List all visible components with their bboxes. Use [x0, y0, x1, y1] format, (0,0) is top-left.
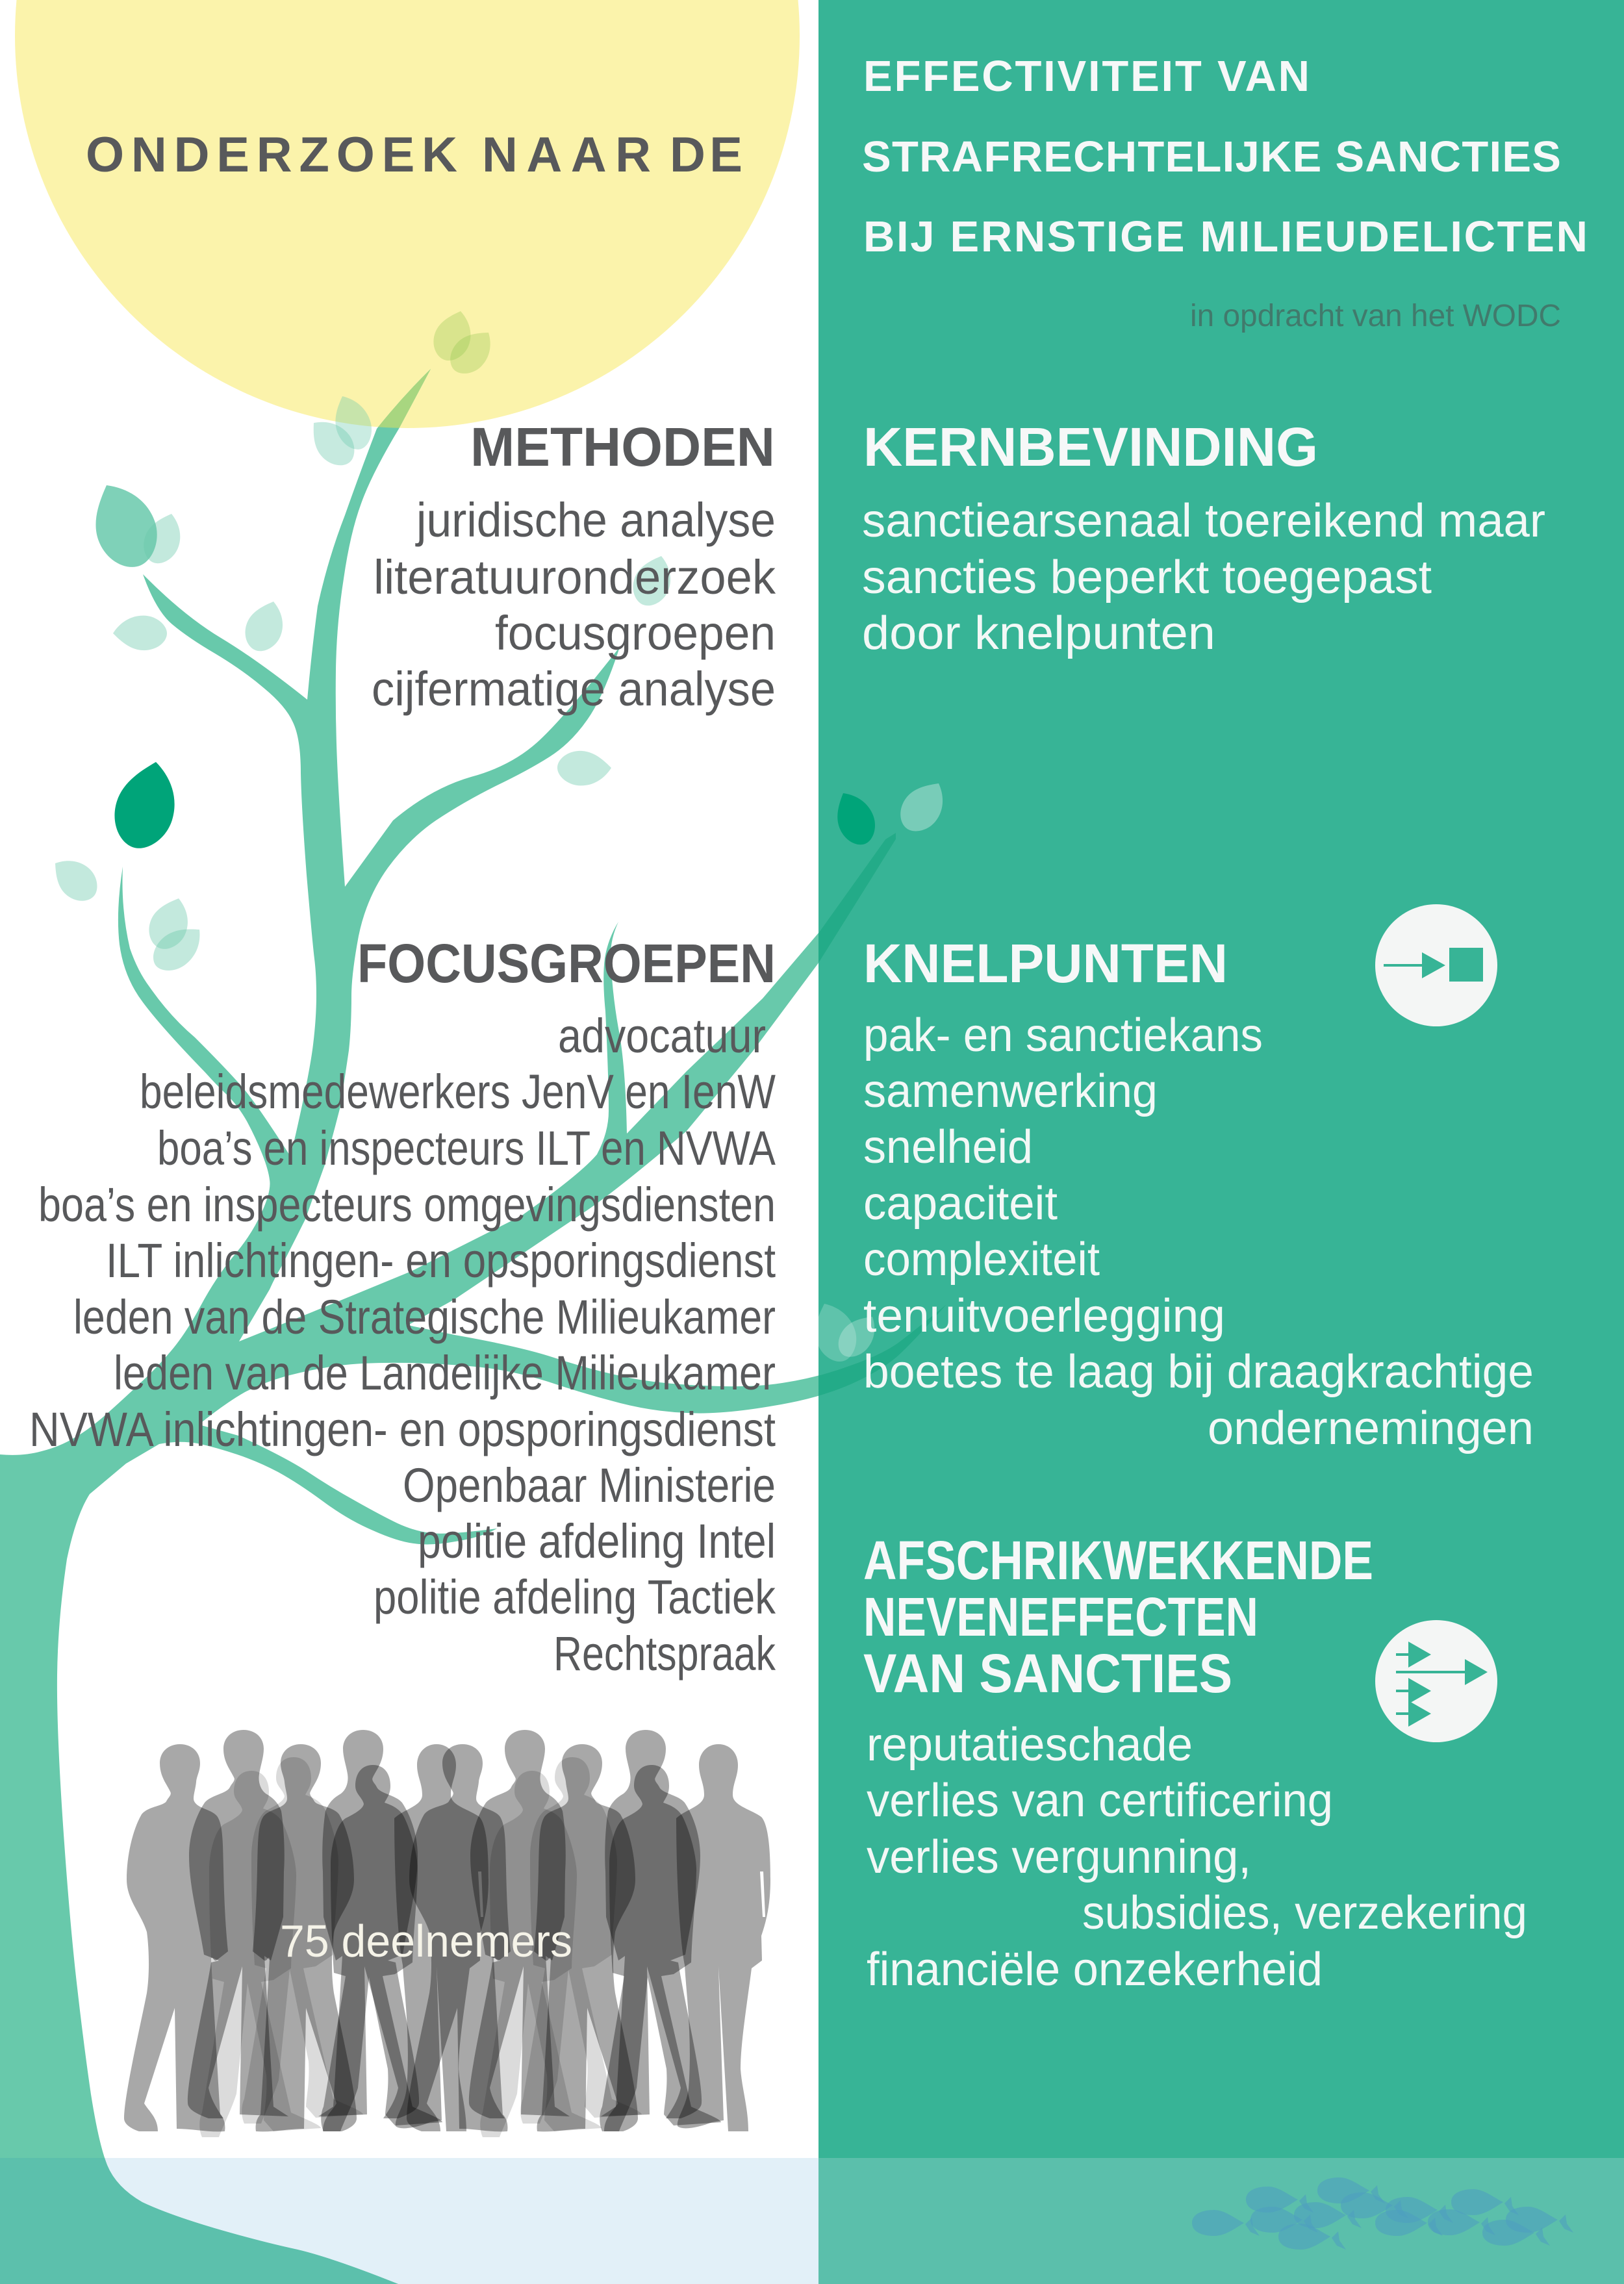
text: kernbevinding: sanctiearsenaal toereikend maar [862, 495, 1545, 547]
heading: kernbevinding: KERNBEVINDING [863, 416, 1318, 477]
water band, right [818, 2158, 1624, 2284]
water band, left [0, 2158, 818, 2284]
panel: methoden [372, 416, 776, 716]
list: knelpunten: boetes te laag bij draagkrachtige [863, 1346, 1534, 1398]
list: focusgroepen: Openbaar Ministerie [403, 1458, 776, 1512]
list: focusgroepen: beleidsmedewerkers JenV en IenW [140, 1065, 776, 1119]
text: kernbevinding: sancties beperkt toegepast [862, 552, 1432, 603]
list: focusgroepen: leden van de Landelijke Milieukamer [114, 1346, 776, 1400]
title: left part: NAAR [482, 127, 651, 183]
list: neveneffecten: verlies van certificering [867, 1775, 1333, 1827]
tree [0, 369, 947, 2284]
panel: kernbevinding [862, 416, 1545, 659]
list: focusgroepen: politie afdeling Intel [418, 1514, 776, 1568]
list: focusgroepen: politie afdeling Tactiek [374, 1570, 776, 1624]
icon: converging arrows [1375, 1620, 1497, 1742]
panel: focusgroepen [29, 933, 776, 1681]
label: 75 deelnemers: 75 deelnemers [280, 1916, 572, 1966]
list: knelpunten: snelheid [863, 1121, 1033, 1173]
list: knelpunten: complexiteit [863, 1234, 1100, 1286]
list: knelpunten: capaciteit [863, 1178, 1058, 1230]
list: focusgroepen: NVWA inlichtingen- en opsporingsdienst [29, 1402, 776, 1456]
fish school [1192, 2177, 1573, 2250]
list: neveneffecten: verlies vergunning, [867, 1831, 1251, 1883]
text: kernbevinding: door knelpunten [862, 607, 1215, 659]
heading: afschrikwekkende neveneffecten van sancties: NEVENEFFECTEN [863, 1586, 1258, 1647]
heading: afschrikwekkende neveneffecten van sancties: AFSCHRIKWEKKENDE [863, 1530, 1373, 1591]
panel: knelpunten [863, 904, 1534, 1454]
list: neveneffecten: reputatieschade [867, 1719, 1193, 1771]
text: kernbevinding [862, 495, 1545, 659]
list: neveneffecten: subsidies, verzekering [1082, 1887, 1527, 1939]
list: methoden: cijfermatige analyse [372, 662, 776, 716]
list: neveneffecten [867, 1719, 1527, 1996]
list: methoden [372, 493, 776, 716]
list: knelpunten: samenwerking [863, 1065, 1158, 1117]
title: right part: BIJ ERNSTIGE MILIEUDELICTEN [863, 212, 1588, 261]
list: focusgroepen: Rechtspraak [553, 1627, 776, 1681]
heading: knelpunten: KNELPUNTEN [863, 933, 1228, 994]
list: focusgroepen: boa’s en inspecteurs omgevingsdiensten [38, 1178, 776, 1232]
title: right part [862, 52, 1588, 261]
heading: methoden: METHODEN [470, 416, 775, 477]
heading: focusgroepen: FOCUSGROEPEN [357, 933, 776, 994]
list: methoden: juridische analyse [415, 493, 776, 547]
subtitle: in opdracht van het WODC [1190, 299, 1561, 333]
heading: afschrikwekkende neveneffecten van sancties: VAN SANCTIES [863, 1643, 1232, 1704]
list: focusgroepen: leden van de Strategische Milieukamer [73, 1290, 776, 1344]
icon: arrow into square [1375, 904, 1497, 1026]
list: knelpunten [863, 1009, 1534, 1454]
list: focusgroepen: advocatuur [558, 1009, 766, 1063]
list: neveneffecten: financiële onzekerheid [867, 1944, 1323, 1996]
list: methoden: literatuuronderzoek [374, 550, 776, 604]
panel: right green column [818, 0, 1624, 2284]
list: focusgroepen: boa’s en inspecteurs ILT en NVWA [157, 1121, 776, 1175]
title: left part: DE [670, 127, 742, 183]
list: focusgroepen: ILT inlichtingen- en opsporingsdienst [106, 1234, 776, 1288]
title: right part: EFFECTIVITEIT VAN [863, 52, 1310, 101]
list: knelpunten: ondernemingen [1208, 1402, 1534, 1454]
title: left part [86, 127, 742, 183]
title: left part: ONDERZOEK [86, 127, 457, 183]
list: knelpunten: tenuitvoerlegging [863, 1290, 1225, 1342]
leaves [44, 306, 954, 1367]
sun [15, 0, 800, 428]
list: methoden: focusgroepen [495, 606, 776, 660]
panel: afschrikwekkende neveneffecten [863, 1530, 1527, 1996]
people silhouettes [124, 1730, 770, 2137]
heading: afschrikwekkende neveneffecten van sancties [863, 1530, 1373, 1704]
title: right part: STRAFRECHTELIJKE SANCTIES [862, 133, 1561, 181]
list: knelpunten: pak- en sanctiekans [863, 1009, 1263, 1061]
list: focusgroepen [29, 1009, 776, 1681]
